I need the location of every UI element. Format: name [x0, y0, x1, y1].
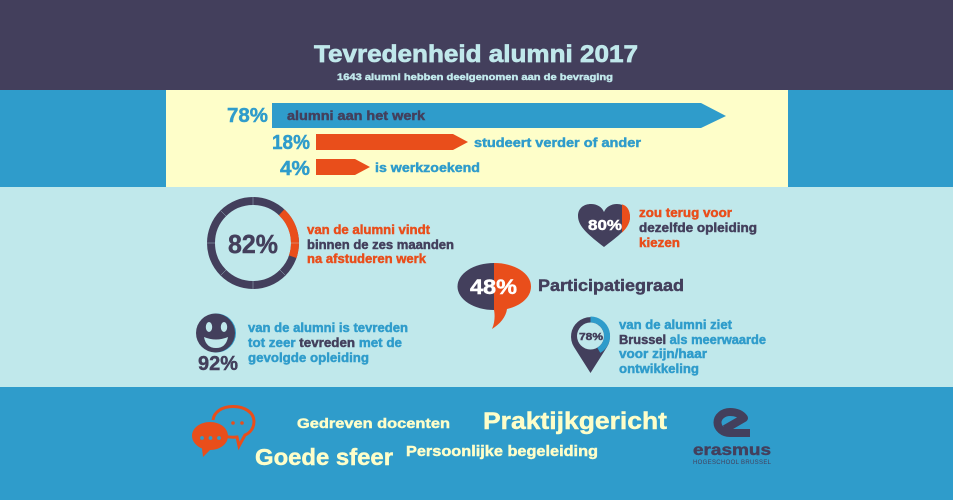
text: satisfied: van de alumni is tevreden: [248, 321, 408, 335]
logo: erasmus: erasmus: [693, 442, 771, 459]
bar: 18% studying: [272, 132, 641, 154]
text: would choose again: dezelfde opleiding: [639, 221, 757, 235]
panel: employment status: [0, 90, 953, 187]
text: Brussels added value: van de alumni ziet: [619, 318, 733, 332]
icon: map pin 78%: [571, 317, 610, 373]
text: work within six months: na afstuderen werk: [307, 252, 426, 266]
bar: 78% at work: alumni aan het werk: [287, 108, 426, 123]
donut chart: 82%: 82%: [228, 229, 278, 259]
text: satisfied: [248, 321, 408, 365]
donut chart: 82%: [207, 197, 299, 289]
logo: erasmus: HOGESCHOOL BRUSSEL: [693, 460, 772, 466]
bar: 4% job seeking: [280, 158, 480, 180]
logo: erasmus: [693, 412, 772, 466]
bar: 18% studying: studeert verder of ander: [474, 135, 641, 150]
icon: heart 80%: 80%: [588, 218, 622, 234]
icon: speech bubble 48%: [458, 263, 531, 329]
icon: speech bubble 48%: 48%: [470, 276, 517, 299]
text: work within six months: binnen de zes maanden: [307, 238, 454, 252]
label: participation: Participatiegraad: [538, 276, 684, 295]
bar: 18% studying: 18%: [272, 132, 310, 154]
panel: statistics: [0, 187, 953, 387]
icon: chat bubbles: [192, 406, 254, 457]
text: would choose again: zou terug voor: [639, 206, 732, 220]
text: Brussels added value: [619, 318, 766, 376]
title: Tevredenheid alumni 2017: [314, 41, 638, 68]
bar: 78% at work: [227, 103, 726, 128]
subtitle: 1643 alumni hebben deelgenomen aan de bevraging: [337, 72, 613, 83]
word cloud: [255, 408, 667, 470]
bar: 4% job seeking: 4%: [280, 158, 310, 180]
text: satisfied: tot zeer tevreden met de: [248, 336, 402, 350]
text: Brussels added value: Brussel als meerwaarde: [619, 333, 766, 347]
text: would choose again: [639, 206, 757, 250]
panel: footer: [0, 387, 953, 500]
word cloud: Praktijkgericht: [483, 408, 667, 435]
text: Brussels added value: voor zijn/haar: [619, 347, 707, 361]
word cloud: Persoonlijke begeleiding: [406, 443, 598, 460]
text: would choose again: kiezen: [639, 236, 680, 250]
panel: header: [0, 0, 953, 90]
bar: 4% job seeking: is werkzoekend: [375, 160, 480, 175]
icon: map pin 78%: 78%: [579, 331, 604, 343]
word cloud: Goede sfeer: [255, 444, 393, 470]
word cloud: Gedreven docenten: [297, 415, 450, 431]
bar: 78% at work: 78%: [227, 105, 268, 127]
text: satisfied: gevolgde opleiding: [248, 351, 369, 365]
text: work within six months: [307, 223, 454, 266]
icon: smiley 92%: 92%: [198, 353, 238, 375]
icon: smiley 92%: [196, 314, 238, 375]
text: work within six months: van de alumni vindt: [307, 223, 431, 237]
text: Brussels added value: ontwikkeling: [619, 362, 699, 376]
icon: heart 80%: [578, 204, 630, 247]
